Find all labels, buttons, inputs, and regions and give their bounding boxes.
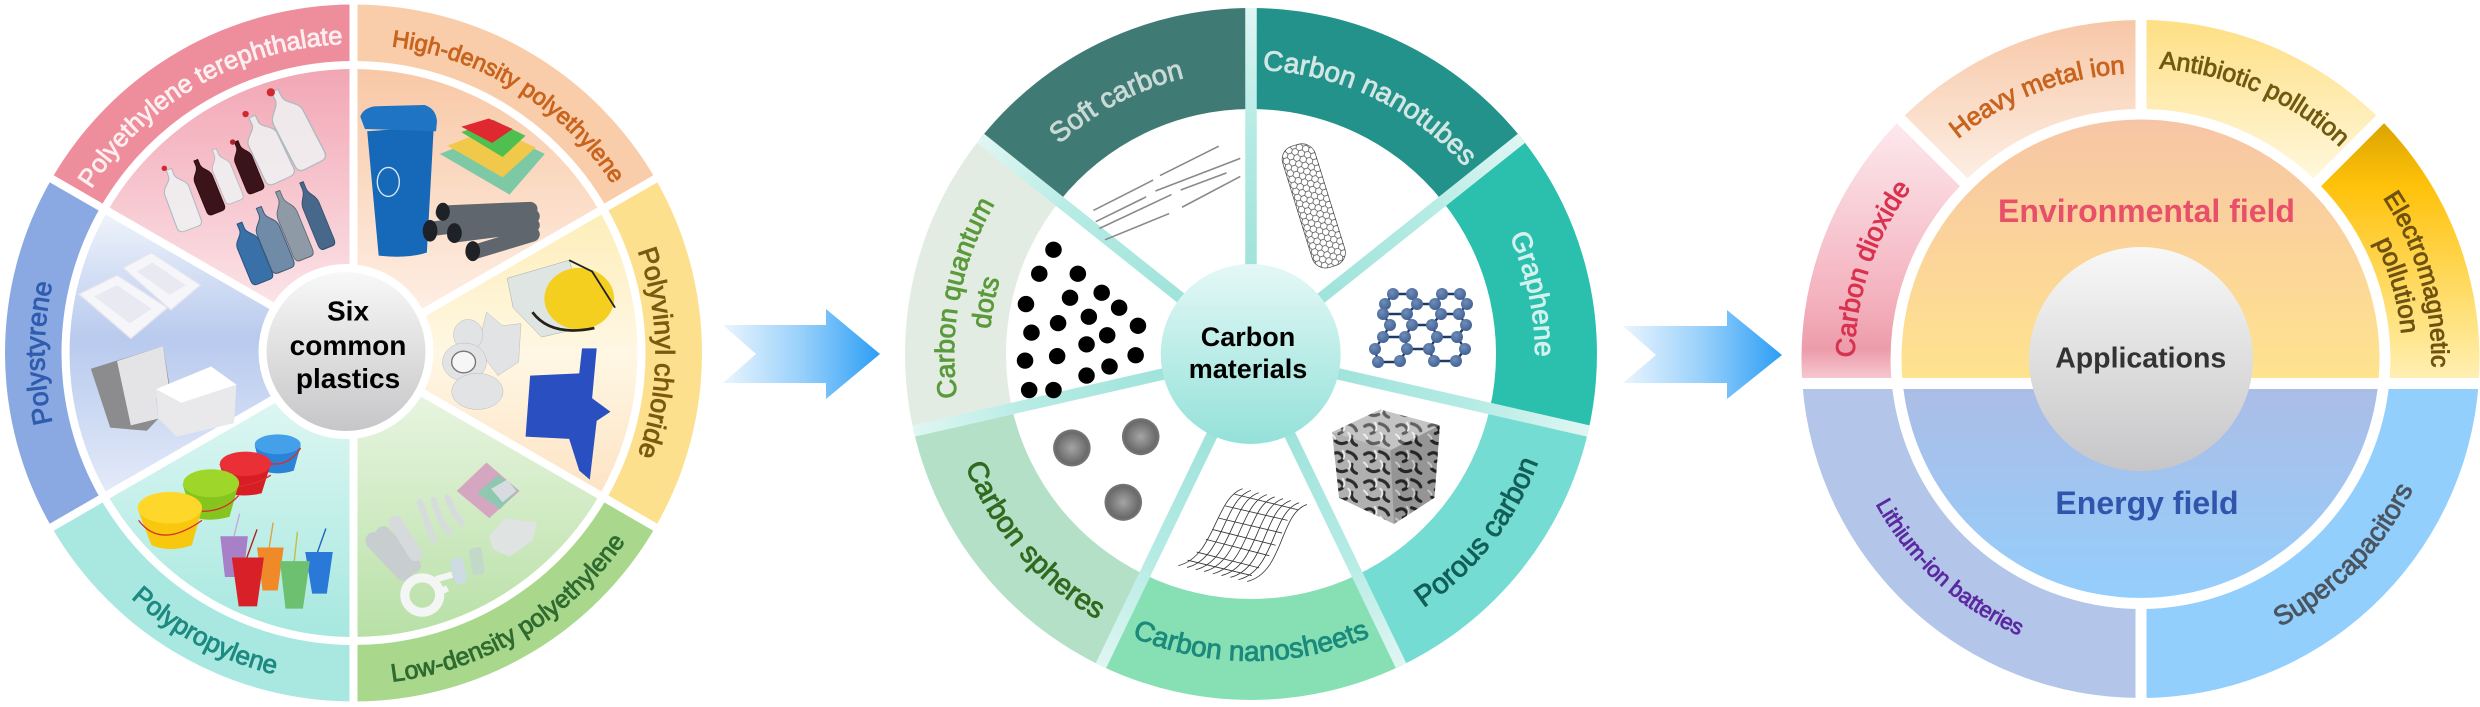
icon: carbon quantum dots [1017, 242, 1146, 398]
band: carbon spheres [914, 408, 1145, 666]
label: Heavy metal ion: Heavy metal ion [1948, 58, 2124, 138]
label: Carbon quantum dots: dots [971, 277, 1000, 328]
label: Carbon quantum dots: Carbon quantum [934, 199, 994, 398]
label: Polystyrene: Polystyrene [26, 282, 52, 425]
label: Low-density polyethylene: Low-density polyethylene [391, 536, 624, 682]
center hub: Six common plastics: plastics [296, 363, 400, 394]
label: Lithium-ion batteries: Lithium-ion batteries [1876, 498, 2022, 635]
band: carbon nanosheets [1101, 575, 1401, 700]
icon: HDPE bin, sheets and pipes [360, 105, 545, 261]
label: High-density polyethylene: High-density polyethylene [392, 30, 621, 182]
band: polystyrene [5, 179, 101, 527]
heading: Environmental field: Environmental field [1998, 193, 2295, 229]
band: graphene [1442, 138, 1597, 431]
center hub: Carbon materials [1161, 264, 1341, 444]
center hub: Applications: Applications [2055, 342, 2226, 374]
wedge: polystyrene photo area [70, 211, 353, 495]
band: polyethylene terephthalate [52, 4, 353, 207]
label: Electromagnetic pollution: pollution [2370, 236, 2416, 333]
band: lithium-ion batteries [1802, 384, 2140, 698]
icon: carbon spheres [1053, 418, 1160, 521]
band: antibiotic pollution [2140, 20, 2380, 182]
label: Antibiotic pollution: Antibiotic pollution [2158, 52, 2347, 147]
center hub: Six common plastics: common [290, 330, 406, 361]
arrow: carbon materials to applications [1623, 310, 1782, 399]
icon: LDPE film, gloves and tubing [374, 462, 537, 612]
icon: PP buckets and cups [138, 434, 333, 609]
label: Electromagnetic pollution: Electromagnetic [2383, 190, 2450, 368]
wedge: polyethylene terephthalate photo area [108, 69, 353, 353]
wedge: low-density polyethylene photo area [354, 353, 599, 637]
center hub: Six common plastics [258, 264, 434, 439]
icon: graphene lattice [1369, 288, 1473, 368]
wedge: polyvinyl chloride photo area [354, 211, 637, 495]
band: porous carbon [1357, 408, 1588, 666]
label: Supercapacitors: Supercapacitors [2274, 484, 2412, 625]
wheel: six common plastics [5, 4, 702, 702]
center hub: Applications [2029, 247, 2253, 471]
band: carbon dioxide [1801, 119, 1964, 384]
label: Carbon spheres: Carbon spheres [968, 462, 1104, 618]
label: Carbon nanotubes: Carbon nanotubes [1264, 50, 1474, 166]
heading: Energy field: Energy field [2055, 485, 2239, 521]
segment: environmental field [1901, 119, 2380, 378]
center hub: Carbon materials: Carbon [1201, 322, 1295, 352]
icon: soft carbon layers [1093, 146, 1240, 240]
band: high-density polyethylene [354, 4, 655, 207]
label: Soft carbon: Soft carbon [1050, 64, 1184, 142]
center hub: Six common plastics: Six [327, 296, 369, 327]
label: Carbon nanosheets: Carbon nanosheets [1135, 621, 1368, 662]
wedge: high-density polyethylene photo area [354, 69, 599, 353]
band: low-density polyethylene [354, 499, 655, 702]
wheel: applications [1802, 20, 2480, 698]
icon: PVC helmet, fittings and raincoat [442, 260, 615, 480]
label: Polyethylene terephthalate: Polyethylene terephthalate [77, 28, 342, 188]
wedge: polypropylene photo area [108, 353, 353, 637]
band: heavy metal ion [1901, 20, 2140, 182]
band: polyvinyl chloride [606, 179, 702, 527]
label: Graphene: Graphene [1512, 232, 1550, 356]
band: carbon quantum dots [905, 138, 1060, 431]
band: electromagnetic pollution [2317, 119, 2480, 384]
icon: carbon nanosheet [1178, 489, 1307, 581]
label: Polypropylene: Polypropylene [132, 585, 276, 674]
icon: carbon nanotube [1279, 140, 1349, 271]
band: soft carbon [980, 8, 1251, 201]
icon: PET bottles [157, 83, 336, 286]
icons: carbon structures [1017, 140, 1440, 581]
icon: plastic products [79, 83, 615, 612]
wheel: carbon materials [905, 8, 1597, 700]
arrow: plastics to carbon materials [723, 309, 880, 399]
label: Carbon dioxide: Carbon dioxide [1836, 182, 1910, 356]
icon: porous carbon cube [1332, 410, 1440, 524]
label: Porous carbon: Porous carbon [1413, 458, 1538, 608]
center hub: Carbon materials: materials [1189, 354, 1307, 384]
band: polypropylene [52, 499, 353, 702]
label: Polyvinyl chloride: Polyvinyl chloride [638, 246, 676, 458]
segment: energy field [1903, 389, 2378, 598]
band: carbon nanotubes [1251, 8, 1522, 201]
icon: polystyrene foam containers [79, 252, 236, 437]
band: supercapacitors [2140, 384, 2479, 698]
